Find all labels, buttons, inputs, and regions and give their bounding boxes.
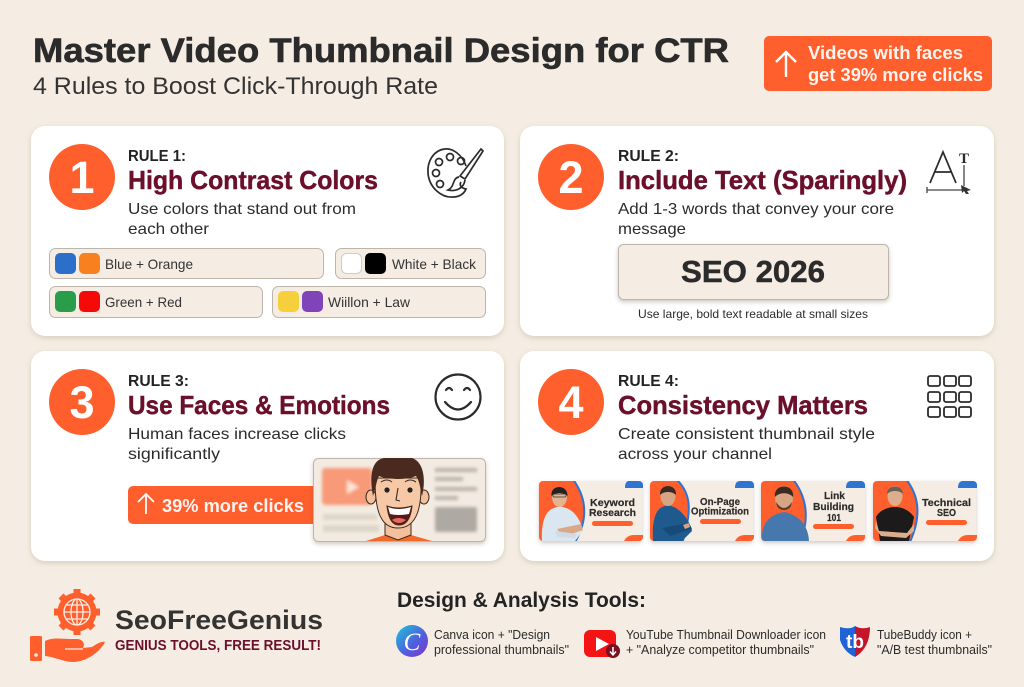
rule 2 description: message — [618, 221, 686, 238]
icon: gear and hand — [30, 589, 105, 662]
icon: text size: T — [959, 151, 969, 167]
rule 1 heading: High Contrast Colors — [128, 165, 378, 195]
rule 4 description: across your channel — [618, 446, 772, 463]
rule 2 description: Add 1-3 words that convey your core — [618, 201, 894, 218]
caption: Use large, bold text readable at small sizes — [638, 307, 868, 321]
sample text box: SEO 2026 — [681, 254, 825, 289]
thumbnail: keyword research — [536, 478, 643, 544]
number badge 4: 4 — [558, 377, 584, 428]
canva description: Canva icon + "Design — [434, 628, 550, 642]
chip: blue + orange — [50, 248, 324, 278]
rule 4 label: RULE 4: — [618, 373, 679, 390]
rule 1 description: each other — [128, 221, 210, 238]
thumbnail: link building 101: 101 — [827, 512, 841, 524]
chip: white + black — [336, 248, 486, 278]
panel: rule 3 — [31, 351, 504, 561]
number badge 3: 3 — [69, 377, 95, 428]
youtube description: YouTube Thumbnail Downloader icon — [626, 628, 826, 642]
panel: rule 2 — [520, 126, 994, 336]
icon: grid — [928, 376, 971, 417]
thumbnail: link building 101 — [758, 478, 865, 544]
sample text box — [618, 244, 888, 300]
icon: palette and brush — [428, 149, 483, 197]
thumbnail: link building 101: Link — [824, 490, 845, 502]
number badge 1 — [49, 144, 115, 210]
chip: white + black: White + Black — [392, 256, 477, 272]
number badge 1: 1 — [69, 152, 95, 203]
thumbnail: on-page optimization — [647, 478, 754, 544]
icon: smiley — [436, 374, 480, 420]
title: Master Video Thumbnail Design for CTR — [33, 32, 729, 70]
number badge 2: 2 — [558, 152, 584, 203]
thumbnail: on-page optimization: Optimization — [691, 506, 749, 518]
thumbnail: technical seo — [870, 478, 977, 544]
thumbnail: technical seo: Technical — [922, 497, 971, 509]
panel: rule 1 — [31, 126, 504, 336]
chip: willon + law: Wiillon + Law — [328, 294, 411, 310]
tool: tubebuddy — [840, 626, 992, 657]
callout: videos with faces: Videos with faces — [808, 43, 963, 63]
rule 3 label: RULE 3: — [128, 373, 189, 390]
thumbnail: technical seo: SEO — [937, 507, 956, 519]
tool: canva — [396, 625, 569, 657]
thumbnail: on-page optimization: On-Page — [700, 496, 740, 508]
canva description: professional thumbnails" — [434, 643, 569, 657]
number badge 2 — [538, 144, 604, 210]
icon: youtube — [584, 630, 620, 658]
rule 3 heading: Use Faces & Emotions — [128, 390, 390, 420]
rule 4 description: Create consistent thumbnail style — [618, 426, 875, 443]
stat pill: 39% more clicks — [162, 496, 304, 516]
rule 2 heading: Include Text (Sparingly) — [618, 165, 907, 195]
rule 4 heading: Consistency Matters — [618, 390, 868, 420]
rule 1 label: RULE 1: — [128, 148, 186, 165]
thumbnail: keyword research: Keyword — [590, 497, 635, 509]
thumbnail with face — [314, 458, 486, 542]
callout: videos with faces: get 39% more clicks — [808, 65, 983, 85]
thumbnail: keyword research: Research — [589, 507, 636, 519]
tool: youtube downloader — [584, 628, 826, 658]
panel: rule 4 — [520, 351, 994, 561]
icon: text size — [927, 151, 971, 194]
chip: blue + orange: Blue + Orange — [105, 256, 193, 272]
tagline: GENIUS TOOLS, FREE RESULT! — [115, 638, 321, 654]
number badge 4 — [538, 369, 604, 435]
logo: SeoFreeGenius — [30, 589, 323, 662]
callout: videos with faces — [764, 36, 992, 91]
youtube description: + "Analyze competitor thumbnails" — [626, 643, 814, 657]
rule 1 description: Use colors that stand out from — [128, 201, 356, 218]
subtitle: 4 Rules to Boost Click-Through Rate — [33, 73, 438, 100]
icon: tubebuddy shield — [840, 626, 870, 657]
rule 3 description: Human faces increase clicks — [128, 426, 346, 443]
chip: green + red — [50, 286, 262, 318]
number badge 3 — [49, 369, 115, 435]
chip: willon + law — [272, 286, 486, 318]
tools heading: Design & Analysis Tools: — [397, 589, 646, 612]
rule 2 label: RULE 2: — [618, 148, 679, 165]
thumbnail: link building 101: Building — [813, 501, 854, 513]
icon: canva — [396, 625, 428, 657]
tubebuddy description: "A/B test thumbnails" — [877, 643, 992, 657]
rule 3 description: significantly — [128, 446, 220, 463]
chip: green + red: Green + Red — [105, 294, 182, 310]
icon: tubebuddy shield: tb — [846, 632, 864, 653]
tubebuddy description: TubeBuddy icon + — [877, 628, 972, 642]
icon: canva: C — [404, 629, 421, 656]
stat pill — [128, 486, 318, 524]
brand name: SeoFreeGenius — [115, 605, 323, 635]
